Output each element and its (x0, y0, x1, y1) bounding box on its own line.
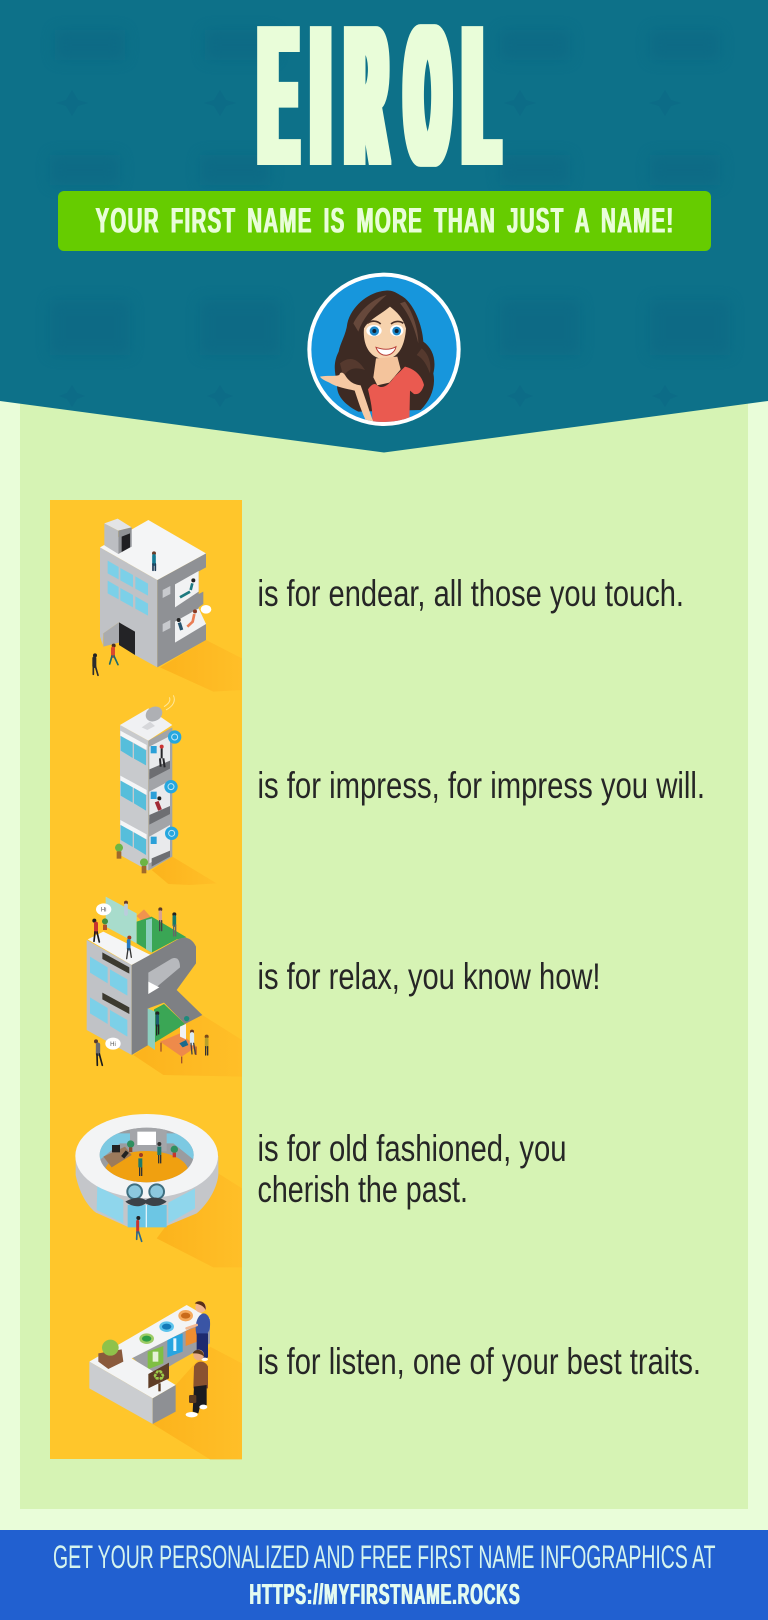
icon: R building: Hi (110, 1042, 116, 1048)
walking people (93, 644, 118, 675)
content panel (20, 380, 748, 1509)
man in blue (187, 1301, 210, 1361)
icon: O ring building with glasses (75, 1114, 242, 1267)
text: O line: cherish the past. (258, 1169, 468, 1210)
text: O line (258, 1128, 566, 1210)
icon: R building: Hi (101, 908, 106, 914)
person at door (136, 1216, 142, 1241)
icon: L recycling counter (89, 1301, 242, 1459)
header: teal chevron (0, 0, 768, 452)
tagline banner (58, 191, 711, 251)
avatar: smiling woman in circle (307, 273, 461, 426)
text: O line: is for old fashioned, you (258, 1128, 566, 1169)
icon: E building (93, 519, 242, 692)
illustration strip (50, 500, 242, 1459)
icon: I tower (115, 695, 217, 885)
footer (0, 1530, 768, 1620)
text: R line: is for relax, you know how! (258, 956, 600, 997)
man in brown (186, 1350, 208, 1417)
person on roof (152, 551, 156, 570)
footer url: HTTPS://MYFIRSTNAME.ROCKS (250, 1579, 520, 1611)
icon: L recycling counter: ♻ (152, 1368, 166, 1385)
icon: R building (87, 897, 242, 1077)
